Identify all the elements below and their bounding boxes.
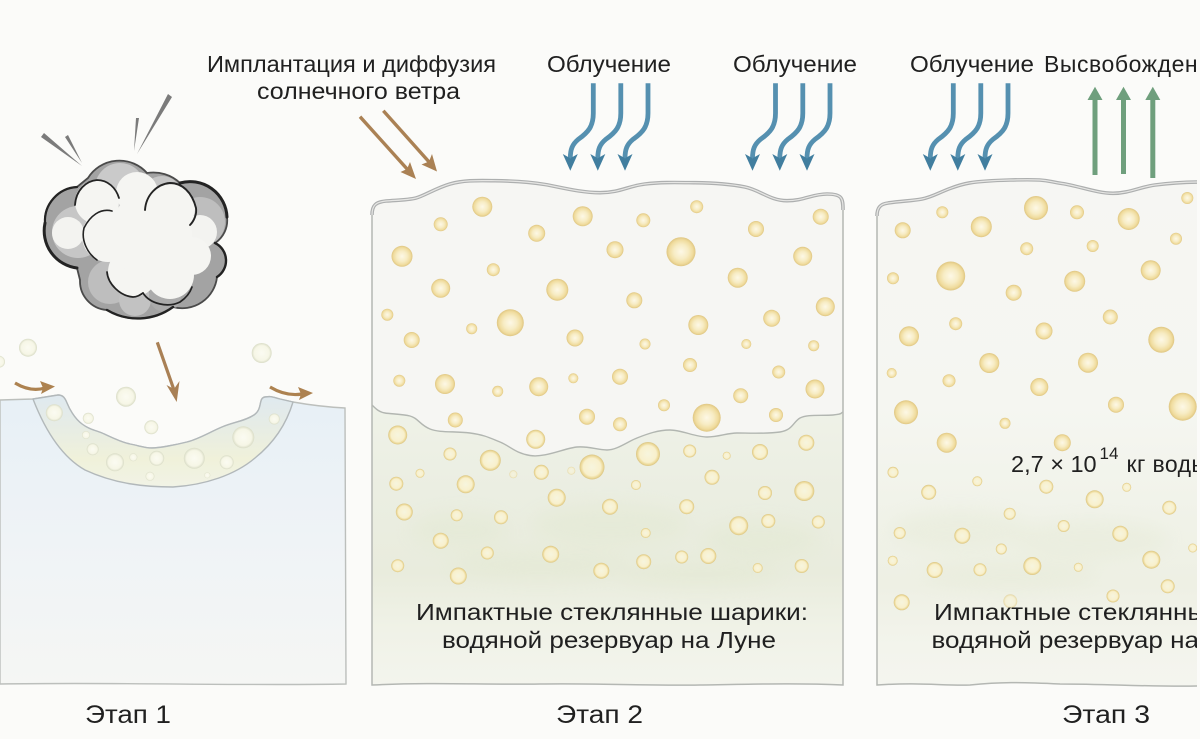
caption: stage 2 — [416, 599, 808, 653]
block upper layer — [372, 181, 843, 685]
arrow: right rim flow — [270, 387, 313, 400]
caption: stage 2: Импактные стеклянные шарики: — [416, 599, 808, 625]
floating beads — [0, 339, 272, 434]
block outline — [372, 210, 843, 685]
cloud ink lines — [44, 180, 227, 318]
glass beads upper — [381, 197, 835, 432]
arrows: irradiation B — [745, 83, 830, 171]
arrows: solar wind — [360, 111, 437, 179]
surface crust — [372, 181, 843, 215]
icon: impact dust cloud — [44, 161, 227, 318]
block lower layer — [372, 405, 843, 685]
icon: impact debris streaks — [41, 94, 172, 166]
heading: irradiation A: Облучение — [547, 51, 671, 77]
regolith block — [0, 395, 346, 685]
caption: stage 3 — [933, 604, 1197, 653]
heading: solar wind implantation: Имплантация и диффузия — [207, 51, 496, 77]
caption: stage 2: водяной резервуар на Луне — [442, 627, 776, 653]
arrows: irradiation C — [923, 83, 1008, 171]
callout: water mass: 2,7 × 10 — [1011, 451, 1097, 477]
crater ejecta layer — [33, 395, 293, 487]
arrows: release — [1088, 87, 1160, 178]
surface crust — [877, 180, 1200, 216]
mottled sediment — [890, 510, 1170, 589]
heading: irradiation C: Облучение — [910, 51, 1034, 77]
block outline — [877, 216, 1200, 686]
panel: stage 1 impact crater — [0, 339, 346, 685]
arrow: left rim flow — [15, 381, 55, 394]
label: stage 3: Этап 3 — [1062, 701, 1150, 729]
panel: stage 3 regolith — [877, 51, 1200, 686]
callout: water mass — [1012, 448, 1197, 477]
beads in crater — [46, 404, 280, 481]
interface line — [372, 405, 843, 456]
block fill — [878, 409, 1197, 685]
callout: water mass: 14 — [1100, 444, 1118, 463]
arrows: irradiation A — [563, 83, 648, 171]
glass beads lower — [888, 467, 1197, 610]
glass beads lower — [388, 426, 825, 584]
label: stage 2: Этап 2 — [556, 701, 643, 729]
heading: solar wind implantation — [207, 51, 496, 104]
mottled sediment — [410, 503, 820, 587]
label: stage 1: Этап 1 — [85, 701, 171, 729]
panel: stage 2 regolith — [372, 181, 843, 685]
cloud silhouette — [44, 161, 227, 318]
glass beads upper — [887, 192, 1197, 453]
heading: irradiation B: Облучение — [733, 51, 857, 77]
heading: solar wind implantation: солнечного ветра — [257, 78, 460, 104]
arrow: impact direction — [157, 342, 180, 402]
cloud shading — [52, 163, 225, 316]
